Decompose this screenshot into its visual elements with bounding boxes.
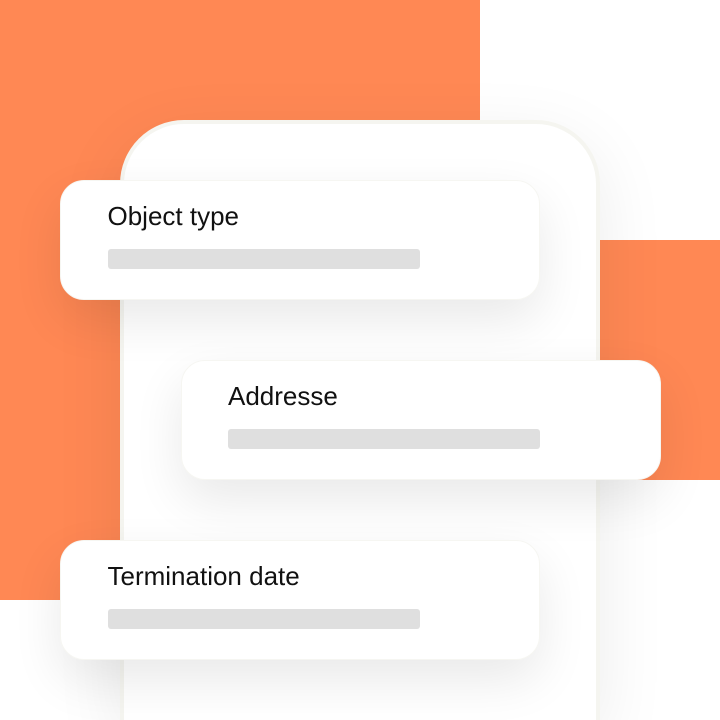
placeholder bar: object type bbox=[108, 249, 420, 269]
panel: large orange block bbox=[0, 0, 480, 600]
panel: phone outline bbox=[120, 120, 600, 720]
panel: small orange block bbox=[600, 240, 720, 480]
label: addresse: Addresse bbox=[228, 381, 338, 411]
placeholder bar: termination date bbox=[108, 609, 420, 629]
card: termination date bbox=[60, 540, 540, 660]
card: object type bbox=[60, 180, 540, 300]
label: object type: Object type bbox=[108, 201, 239, 231]
placeholder bar: addresse bbox=[228, 429, 540, 449]
label: termination date: Termination date bbox=[108, 561, 300, 591]
card: addresse bbox=[180, 360, 660, 480]
